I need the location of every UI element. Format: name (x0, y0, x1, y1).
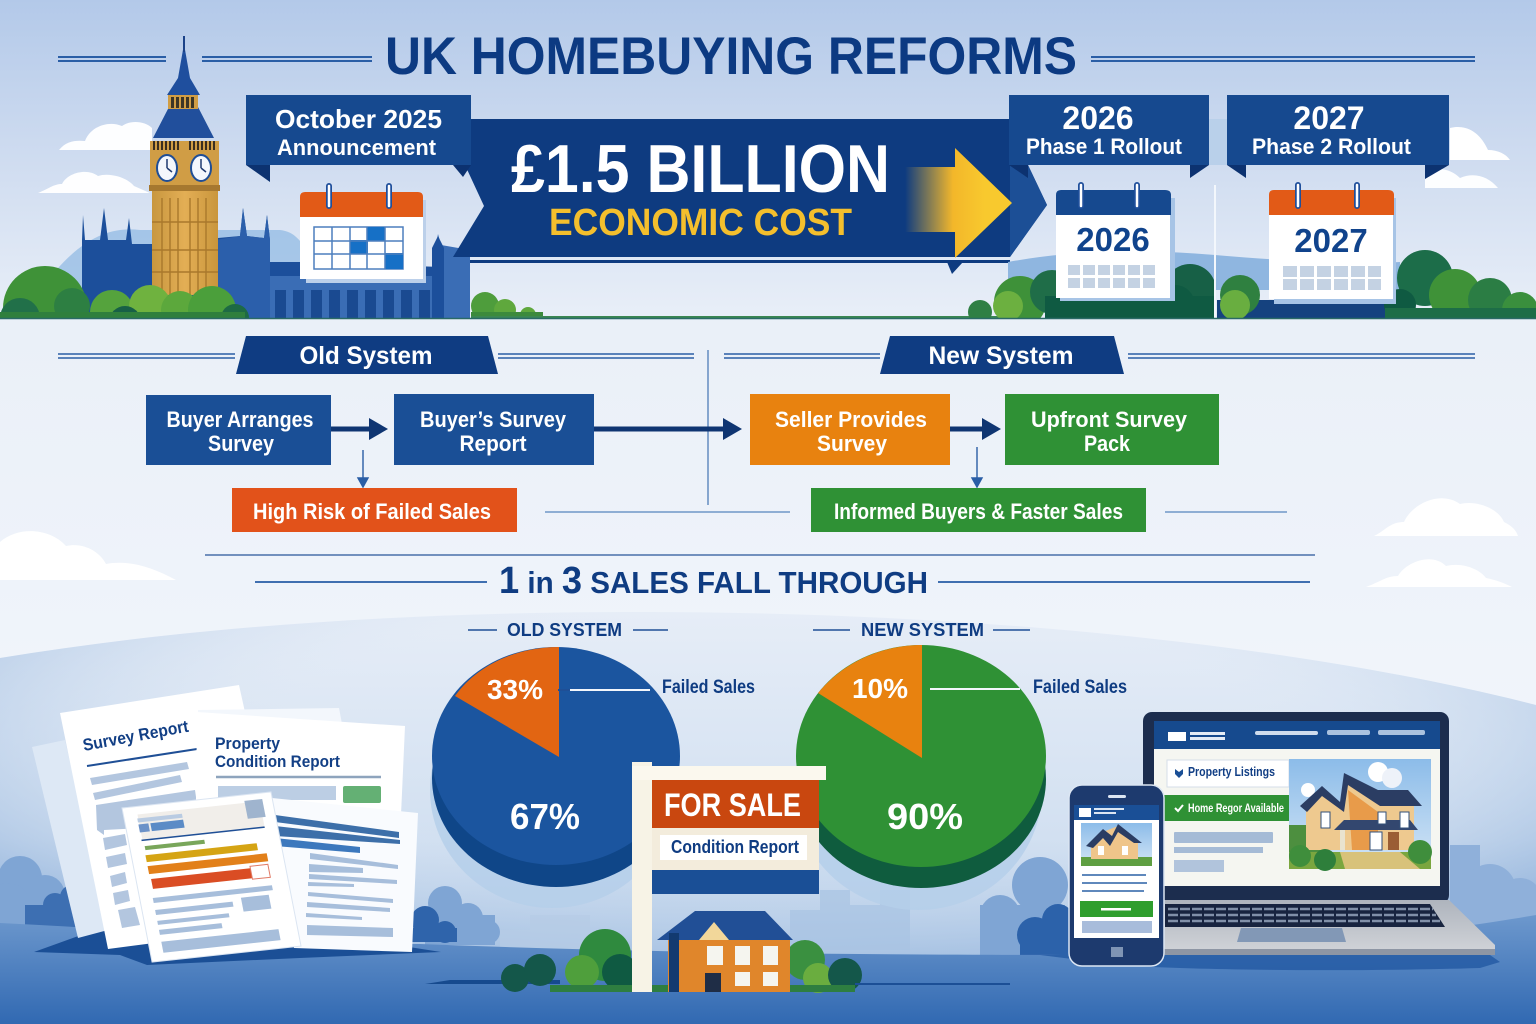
home report availability badge: Home Regor Available (1188, 801, 1284, 815)
illustration: Big Ben clock tower (149, 36, 220, 295)
home report availability badge (1164, 795, 1289, 821)
back sheet (32, 740, 108, 938)
illustration: left hedges (0, 266, 999, 318)
laptop base and keyboard (1164, 900, 1495, 955)
heading: new system: New System (928, 342, 1074, 370)
flow box: buyer's survey report (394, 394, 594, 465)
10 percent wedge (818, 645, 922, 758)
flow box: buyer arranges survey (146, 395, 331, 465)
property condition report sheet (196, 708, 405, 815)
flow box: seller provides survey: Survey (817, 431, 888, 456)
pie chart: new system: Failed Sales (1033, 677, 1127, 698)
flow box: buyer's survey report: Buyer’s Survey (420, 407, 567, 432)
outcome: informed buyers and faster sales: Informed Buyers & Faster Sales (834, 499, 1123, 524)
skyline and bushes (0, 845, 1536, 955)
arrow: down to high risk (358, 450, 368, 487)
calendar: 2027: 2027 (1294, 222, 1368, 259)
ground line under top band (0, 318, 1536, 320)
flow box: seller provides survey (750, 394, 950, 465)
subheading: ECONOMIC COST (549, 202, 852, 244)
pie chart: old system: Failed Sales (662, 677, 755, 698)
illustration: Parliament skyline (40, 208, 470, 318)
arrow: down to informed buyers (972, 447, 982, 487)
property condition report sheet: Condition Report (215, 753, 340, 771)
pie chart: old system: 33% (487, 674, 543, 705)
sign panel: FOR SALE (664, 787, 801, 823)
condition report rider (652, 828, 819, 870)
banner: 2026 phase 1 rollout (1009, 95, 1209, 178)
property condition report sheet: Property (215, 735, 281, 753)
listing house photo (1289, 759, 1432, 871)
right-hand text sheet (272, 798, 418, 952)
pie chart: old system: 67% (510, 796, 580, 837)
calendar: 2026 (1056, 185, 1175, 301)
title rules (58, 57, 1475, 61)
banner: October 2025 announcement: October 2025 (275, 104, 442, 134)
illustration: house and shrubs (425, 911, 1010, 993)
heading: new system (880, 336, 1124, 374)
arrow: old step 1 to 2 (331, 418, 388, 440)
title: UK HOMEBUYING REFORMS (385, 27, 1077, 86)
front sheet with rating bars (122, 792, 301, 962)
flow box: upfront survey pack (1005, 394, 1219, 465)
right background hill and divider (1008, 119, 1400, 290)
sign panel (652, 780, 819, 828)
arrow: new step 1 to 2 (950, 418, 1001, 440)
banner: 2026 phase 1 rollout: Phase 1 Rollout (1026, 134, 1183, 159)
yellow arrow (905, 148, 1012, 274)
banner: 2027 phase 2 rollout: 2027 (1293, 100, 1365, 136)
listings label: Property Listings (1188, 764, 1275, 779)
survey report sheet (60, 685, 292, 949)
for sale sign (632, 762, 826, 992)
condition report rider: Condition Report (671, 837, 799, 857)
banner: October 2025 announcement: Announcement (277, 135, 437, 160)
banner: 2027 phase 2 rollout: Phase 2 Rollout (1252, 134, 1412, 159)
headline figure: £1.5 BILLION (511, 131, 890, 207)
pie chart: new system: 90% (887, 796, 963, 837)
banner: 2026 phase 1 rollout: 2026 (1062, 100, 1134, 136)
banner: October 2025 announcement (246, 95, 471, 182)
leader line (558, 689, 570, 691)
listings label (1167, 760, 1289, 787)
flow box: upfront survey pack: Pack (1084, 431, 1131, 456)
documents: survey and condition reports (32, 685, 441, 965)
clouds (0, 122, 1518, 587)
calendar: 2026: 2026 (1076, 221, 1150, 258)
illustration: right hedges (968, 250, 1536, 318)
divider above statistic (205, 554, 1315, 556)
pie chart: new system: 10% (852, 673, 908, 704)
flow box: upfront survey pack: Upfront Survey (1031, 407, 1188, 432)
survey report sheet: Survey Report (81, 717, 190, 755)
pie chart: old system (430, 620, 755, 908)
outcome: high risk of failed sales (232, 488, 517, 532)
heading: old system: Old System (300, 342, 432, 370)
flow box: seller provides survey: Seller Provides (775, 407, 927, 432)
banner: 2027 phase 2 rollout (1227, 95, 1449, 179)
vertical timeline divider (1214, 185, 1216, 318)
flow box: buyer's survey report: Report (460, 431, 527, 456)
laptop (1040, 712, 1500, 970)
flow box: buyer arranges survey: Buyer Arranges (166, 407, 314, 432)
chart label: NEW SYSTEM (861, 620, 984, 640)
calendar: October 2025 (300, 186, 426, 283)
arrow: old to new (594, 418, 742, 440)
ground (0, 915, 1536, 1024)
outcome: informed buyers and faster sales (811, 488, 1146, 532)
heading: old system (236, 336, 498, 374)
phone house photo (1081, 823, 1152, 866)
chart label: OLD SYSTEM (507, 620, 622, 640)
flow box: buyer arranges survey: Survey (208, 431, 275, 456)
banner: £1.5 billion economic cost (453, 119, 1047, 274)
phone (1069, 785, 1164, 966)
statistic rules (255, 581, 1310, 583)
laptop screen (1154, 721, 1440, 886)
pie chart: new system (794, 620, 1127, 910)
calendar: 2027 (1269, 185, 1396, 304)
outcome: high risk of failed sales: High Risk of Failed Sales (253, 499, 491, 524)
heading: 1 in 3 sales fall through: 1 in 3 SALES FALL THROUGH (499, 560, 928, 602)
33 percent wedge (455, 647, 559, 757)
section rules (58, 350, 1475, 512)
